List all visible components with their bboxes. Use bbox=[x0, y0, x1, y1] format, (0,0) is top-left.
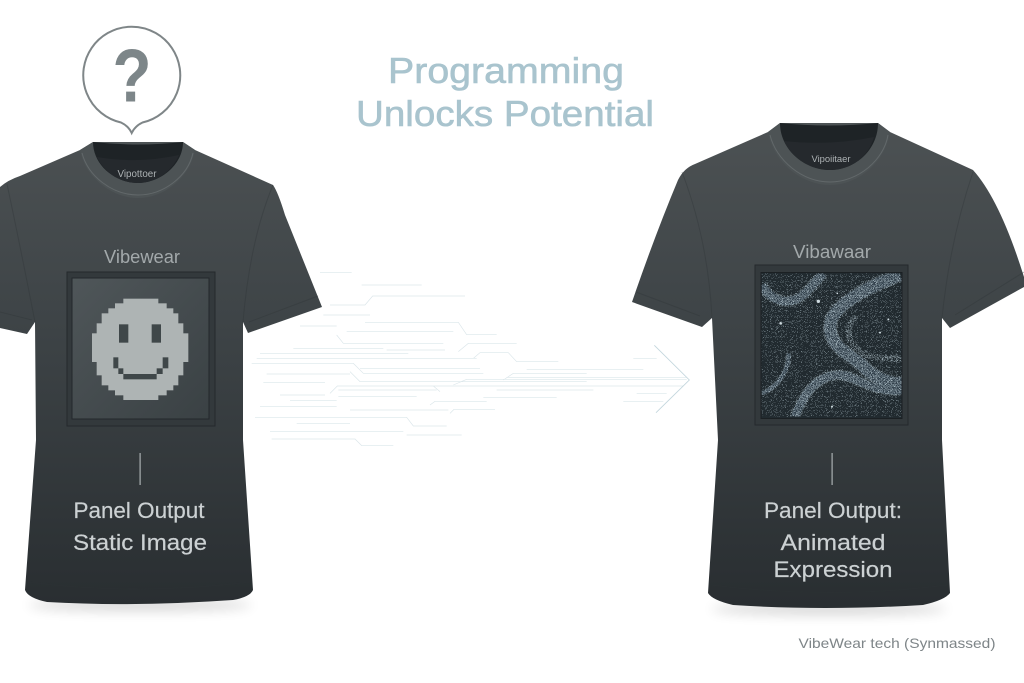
panel output caption: Expression bbox=[774, 557, 892, 582]
title: Unlocks Potential bbox=[356, 93, 654, 134]
icon: question speech bubble bbox=[83, 27, 180, 133]
swirling pattern bbox=[762, 273, 902, 417]
collar stitching bbox=[82, 153, 193, 195]
shirt body bbox=[632, 123, 1024, 608]
panel output caption bbox=[73, 498, 207, 555]
panel output caption: Static Image bbox=[73, 530, 207, 555]
panel output caption: Animated bbox=[780, 530, 886, 555]
connector line bbox=[140, 453, 141, 485]
neck opening bbox=[93, 142, 183, 183]
collar stitching bbox=[770, 135, 888, 182]
sleeve seams and stitching bbox=[0, 184, 318, 589]
scattered speckle bbox=[762, 273, 902, 417]
neck tag text: Vipottoer bbox=[118, 169, 157, 180]
brand label: Vibawaar bbox=[793, 242, 871, 262]
neck opening bbox=[780, 123, 878, 170]
LED panel with smiley bbox=[67, 272, 215, 426]
title: Programming bbox=[388, 50, 624, 91]
hem shadow bbox=[28, 599, 252, 611]
right t-shirt bbox=[632, 123, 1024, 615]
icon: pixel smiley bbox=[92, 299, 188, 400]
arrow: circuit lines bbox=[252, 272, 689, 446]
icon: question speech bubble: ? bbox=[113, 34, 151, 118]
brand label: Vibewear bbox=[104, 247, 180, 267]
panel output caption: Panel Output bbox=[74, 498, 204, 523]
footer credit: VibeWear tech (Synmassed) bbox=[798, 635, 996, 651]
panel output caption bbox=[764, 498, 902, 582]
connector line bbox=[832, 453, 833, 485]
title bbox=[356, 50, 654, 134]
bright stars bbox=[779, 292, 889, 408]
panel output caption: Panel Output: bbox=[764, 498, 902, 523]
shirt body bbox=[0, 142, 322, 604]
collar bbox=[80, 142, 195, 198]
arrow head bbox=[654, 345, 689, 413]
collar bbox=[768, 123, 890, 185]
sleeve seams and stitching bbox=[636, 172, 1024, 592]
hem shadow bbox=[711, 603, 947, 615]
left t-shirt bbox=[0, 142, 322, 611]
neck tag text: Vipoiitaer bbox=[812, 154, 850, 165]
animated panel bbox=[755, 265, 908, 425]
